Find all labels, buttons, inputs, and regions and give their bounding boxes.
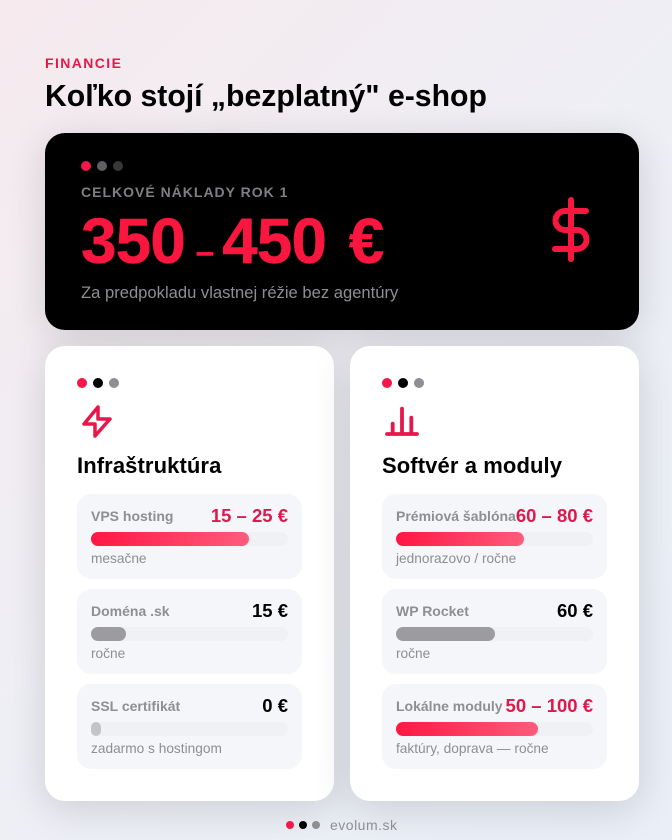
row: WP Rocket — [382, 589, 607, 674]
icon: dollar sign — [552, 197, 590, 262]
progress bar — [91, 532, 288, 546]
row: domain: 15 € — [252, 600, 288, 621]
row: WP Rocket: ročne — [396, 646, 430, 661]
panel: software and modules — [350, 346, 639, 801]
big number: cost range: 350 –450 € — [81, 205, 383, 277]
row: domain: ročne — [91, 646, 125, 661]
row: WP Rocket: WP Rocket — [396, 603, 469, 619]
progress bar — [396, 627, 593, 641]
row: domain — [77, 589, 302, 674]
label: total costs year 1: CELKOVÉ NÁKLADY ROK 1 — [81, 184, 288, 200]
row: SSL certificate: SSL certifikát — [91, 698, 180, 714]
status dots — [77, 378, 119, 388]
footer: brand — [286, 817, 398, 833]
row: domain: Doména .sk — [91, 603, 170, 619]
progress bar — [396, 722, 593, 736]
row: local modules — [382, 684, 607, 769]
row: WP Rocket: 60 € — [557, 600, 593, 621]
row: VPS hosting: 15 – 25 € — [211, 505, 288, 526]
row: SSL certificate — [77, 684, 302, 769]
row: premium template: Prémiová šablóna — [396, 508, 516, 524]
eyebrow: financie: FINANCIE — [45, 55, 122, 71]
row: local modules: Lokálne moduly — [396, 698, 503, 714]
panel: total costs — [45, 133, 639, 330]
progress bar — [91, 627, 288, 641]
row: VPS hosting: VPS hosting — [91, 508, 173, 524]
row: SSL certificate: zadarmo s hostingom — [91, 741, 222, 756]
icon: lightning bolt — [82, 405, 112, 438]
row: local modules: faktúry, doprava — ročne — [396, 741, 549, 756]
progress bar — [396, 532, 593, 546]
brand name: evolum.sk — [330, 817, 398, 833]
footer dots — [286, 821, 320, 829]
heading: software and modules: Softvér a moduly — [382, 453, 562, 478]
title: Koľko stojí „bezplatný" e-shop — [45, 80, 487, 113]
row: local modules: 50 – 100 € — [506, 695, 593, 716]
heading: infrastructure: Infraštruktúra — [77, 453, 221, 478]
panel: infrastructure — [45, 346, 334, 801]
progress bar — [91, 722, 288, 736]
icon: bar chart — [385, 406, 419, 436]
row: VPS hosting: mesačne — [91, 551, 147, 566]
row: premium template: 60 – 80 € — [516, 505, 593, 526]
row: premium template: jednorazovo / ročne — [396, 551, 516, 566]
row: premium template — [382, 494, 607, 579]
row: SSL certificate: 0 € — [262, 695, 288, 716]
status dots — [81, 161, 123, 171]
row: VPS hosting — [77, 494, 302, 579]
note: assumption: Za predpokladu vlastnej réžie bez agentúry — [81, 283, 398, 302]
status dots — [382, 378, 424, 388]
